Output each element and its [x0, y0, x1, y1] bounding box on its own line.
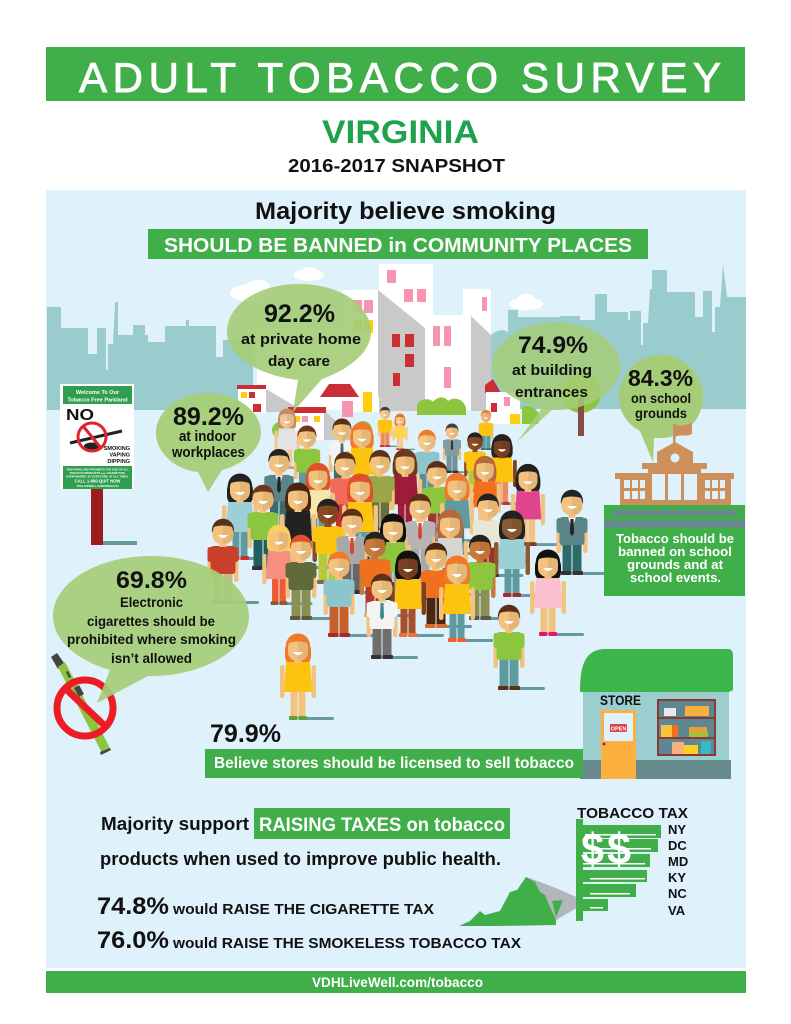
person [378, 407, 402, 447]
person [511, 464, 562, 546]
speech bubble: electronic cigarettes: cigarettes should be [87, 613, 215, 629]
footer banner [46, 971, 746, 993]
person [294, 426, 338, 498]
person [392, 414, 415, 450]
chart: tobacco tax by state: $ [581, 825, 604, 874]
sign: tobacco free parkland: DIPPING [107, 459, 130, 465]
text block: raising taxes: Majority support [101, 814, 249, 834]
person [329, 419, 373, 491]
city buildings [257, 264, 491, 411]
speech bubble: indoor workplaces: workplaces [171, 445, 245, 461]
text block: raising taxes: products when used to improve public health. [100, 849, 501, 869]
person [420, 543, 472, 628]
clouds [230, 267, 543, 310]
stat: smokeless tobacco tax: would RAISE THE SMOKELESS TOBACCO TAX [172, 935, 521, 952]
title: Virginia: VIRGINIA [322, 114, 479, 150]
stat: smokeless tobacco tax: 76.0% [97, 927, 169, 954]
chart: tobacco tax by state [576, 805, 688, 921]
speech bubble: private home day care [227, 284, 371, 412]
person [473, 493, 523, 577]
person [248, 485, 299, 570]
main panel background [46, 190, 746, 968]
speech bubble: electronic cigarettes: prohibited where smoking [67, 631, 236, 647]
person [415, 430, 456, 498]
chart: tobacco tax by state: $ [607, 825, 631, 874]
person [365, 450, 414, 531]
person [422, 461, 471, 542]
stat: stores should be licensed: 79.9% [210, 720, 281, 748]
heading: community places: Majority believe smoking [255, 198, 556, 225]
sign: tobacco free parkland: VDHLIVEWELL.COM/TOBACCO [76, 484, 119, 488]
speech bubble: school grounds: 84.3% [628, 365, 693, 391]
speech bubble: electronic cigarettes: 69.8% [116, 567, 187, 594]
speech bubble: indoor workplaces [156, 393, 261, 492]
small houses [237, 379, 520, 440]
stat: cigarette tax [97, 893, 434, 920]
person [469, 456, 517, 532]
speech bubble: indoor workplaces: at indoor [179, 429, 236, 445]
header banner: ADULT TOBACCO SURVEY [79, 54, 721, 101]
person: orange hair girl [280, 634, 334, 720]
sign: tobacco free parkland: EVERYWHERE, BY EVERYONE, AT ALL TIMES. [66, 474, 129, 478]
speech bubble: electronic cigarettes [53, 556, 249, 703]
person [440, 473, 491, 555]
sign: tobacco free parkland [60, 384, 137, 545]
store illustration [580, 649, 733, 779]
map beam [526, 877, 587, 920]
sign: tobacco free parkland: TOBACCO PRODUCTS e.g. CIGARETTES, [70, 471, 126, 475]
person [464, 535, 516, 620]
crowd of people [208, 407, 608, 720]
map: Virginia [459, 877, 563, 926]
speech bubble: building entrances: entrances [515, 384, 588, 401]
speech bubble: private home day care: day care [268, 353, 330, 370]
text block: raising taxes: RAISING TAXES on tobacco [259, 815, 505, 836]
heading: community places [148, 198, 648, 259]
person [388, 449, 439, 531]
speech bubble: building entrances: at building [512, 362, 592, 379]
person [262, 525, 312, 605]
person [360, 532, 411, 617]
sign: tobacco free parkland: SMOKING [104, 446, 130, 452]
callout: school grounds policy: grounds and at [627, 557, 724, 572]
chart: tobacco tax by state: NC [668, 886, 687, 901]
person [443, 424, 473, 473]
speech bubble: school grounds: grounds [635, 406, 687, 421]
chart: tobacco tax by state: KY [668, 870, 686, 885]
person [264, 449, 313, 530]
person [390, 550, 444, 637]
sign: tobacco free parkland: CALL 1-800-QUIT NOW [75, 478, 120, 484]
bushes and tree [272, 373, 601, 439]
person [222, 474, 276, 560]
person: green shirt man [494, 605, 545, 690]
person [487, 434, 532, 505]
subtitle: snapshot: 2016-2017 SNAPSHOT [288, 156, 505, 176]
callout: school grounds policy: school events. [630, 570, 721, 585]
city skyline left [47, 302, 253, 410]
person [342, 474, 396, 560]
callout: school grounds policy: Tobacco should be [616, 531, 734, 546]
callout: school grounds policy: banned on school [618, 544, 732, 559]
icon: e-cigarette with prohibition sign [51, 653, 113, 755]
store illustration: STORE [600, 692, 641, 708]
city skyline right [491, 264, 746, 409]
stat: smokeless tobacco tax [97, 927, 521, 954]
heading: community places: SHOULD BE BANNED in COMMUNITY PLACES [164, 235, 632, 257]
chart: tobacco tax by state: MD [668, 854, 688, 869]
person [208, 519, 259, 604]
person [432, 510, 486, 596]
school building [615, 423, 734, 505]
person [404, 494, 456, 579]
text block: raising taxes [100, 808, 510, 869]
speech bubble: electronic cigarettes: isn’t allowed [111, 650, 192, 666]
person [346, 422, 394, 500]
person [336, 509, 388, 594]
callout: school grounds policy [604, 505, 745, 596]
sign: tobacco free parkland: THIS PARKLAND PROHIBITS THE USE OF ALL [66, 468, 129, 472]
store illustration: OPEN [611, 726, 626, 732]
speech bubble: school grounds: on school [631, 391, 691, 406]
chart: tobacco tax by state: NY [668, 822, 686, 837]
person [330, 452, 379, 533]
person [366, 574, 418, 659]
person [312, 499, 364, 584]
speech bubble: indoor workplaces: 89.2% [173, 403, 244, 431]
speech bubble: private home day care: 92.2% [264, 300, 335, 328]
sign: tobacco free parkland: VAPING [109, 452, 130, 458]
person [375, 514, 429, 600]
person [556, 490, 608, 575]
person [530, 550, 584, 636]
person [280, 482, 334, 569]
chart: tobacco tax by state: DC [668, 838, 687, 853]
footer banner: VDHLiveWell.com/tobacco [312, 975, 483, 990]
speech bubble: building entrances: 74.9% [518, 332, 588, 359]
person [324, 552, 375, 637]
sign: tobacco free parkland: Tobacco Free Parkland [67, 398, 128, 404]
person [494, 510, 548, 597]
stat: stores should be licensed [205, 720, 583, 778]
speech bubble: private home day care: at private home [241, 331, 361, 348]
speech bubble: school grounds [619, 355, 703, 462]
stat: cigarette tax: would RAISE THE CIGARETTE TAX [172, 901, 434, 918]
person [464, 432, 500, 492]
stat: stores should be licensed: Believe stores should be licensed to sell tobacco [214, 755, 574, 772]
sign: tobacco free parkland: Welcome To Our [76, 390, 120, 396]
person [439, 556, 493, 642]
chart: tobacco tax by state: TOBACCO TAX [577, 805, 688, 822]
sign: tobacco free parkland: NO [66, 407, 94, 424]
person [479, 410, 503, 450]
speech bubble: electronic cigarettes: Electronic [120, 594, 183, 610]
person [301, 463, 352, 545]
person [286, 535, 337, 620]
speech bubble: building entrances [492, 322, 620, 442]
chart: tobacco tax by state: VA [668, 903, 686, 918]
stat: cigarette tax: 74.8% [97, 893, 169, 920]
person [274, 408, 312, 469]
